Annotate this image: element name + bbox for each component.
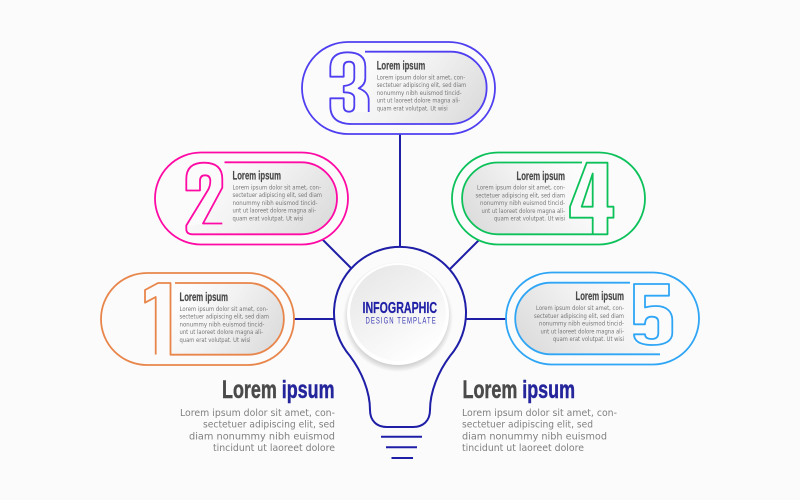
card text 1: unt ut laoreet dolore magna ali- [180, 329, 263, 336]
card text 5: unt ut laoreet dolore magna ali- [540, 328, 624, 335]
card text 1: nonummy nibh euismod tincid- [180, 321, 264, 328]
disc title: INFOGRAPHIC [362, 300, 437, 317]
text block: right: Lorem ipsum dolor sit amet, con- [462, 408, 617, 419]
card text 2: quam erat volutpat. Ut wisi [232, 215, 304, 222]
card text 4: sectetuer adipiscing elit, sed diam [476, 192, 565, 199]
card text 3: Lorem ipsum dolor sit amet, con- [377, 74, 465, 82]
numeral 2 outline [186, 162, 337, 234]
disc subtitle: DESIGN TEMPLATE [366, 315, 436, 326]
card text 3: nonummy nibh euismod tincid- [377, 90, 462, 97]
card text 4: Lorem ipsum [516, 171, 565, 183]
card text 3 [377, 60, 466, 112]
panel: step 4 [452, 152, 645, 244]
right heading: Lorem ipsum [462, 376, 575, 404]
numeral 5 outline [515, 283, 672, 354]
text block: left [180, 376, 335, 454]
panel: step 1 [101, 273, 294, 365]
card text 5: Lorem ipsum [576, 291, 624, 303]
numeral 3 outline [330, 52, 487, 124]
card text 4: nonummy nibh euismod tincid- [480, 200, 565, 207]
card text 4: Lorem ipsum dolor sit amet, con- [477, 185, 565, 192]
card text 3: Lorem ipsum [377, 60, 425, 72]
card text 4: unt ut laoreet dolore magna ali- [482, 208, 565, 215]
left heading: Lorem ipsum [222, 376, 334, 404]
text block: right: sectetuer adipiscing elit, sed [462, 420, 593, 431]
card text 1 [180, 292, 269, 344]
text block: left: sectetuer adipiscing elit, sed [203, 420, 335, 431]
text block: left: Lorem ipsum dolor sit amet, con- [180, 408, 335, 419]
card text 3: quam erat volutpat. Ut wisi [377, 105, 448, 112]
panel: step 2 [155, 152, 348, 244]
card text 4 [476, 171, 565, 222]
card text 1: quam erat volutpat. Ut wisi [180, 337, 251, 344]
text block: right: diam nonummy nibh euismod [462, 431, 607, 442]
card text 1: sectetuer adipiscing elit, sed diam [180, 314, 269, 321]
card text 5: nonummy nibh euismod tincid- [539, 321, 624, 328]
text block: right: tincidunt ut laoreet dolore [462, 443, 584, 454]
panel: step 3 [302, 42, 495, 134]
card text 2: sectetuer adipiscing elit, sed diam [232, 192, 322, 199]
icon: light bulb outline [334, 247, 466, 458]
central disc with title [343, 262, 453, 372]
card text 5: quam erat volutpat. Ut wisi [553, 336, 624, 343]
text block: left: tincidunt ut laoreet dolore [213, 443, 335, 454]
card text 4: quam erat volutpat. Ut wisi [494, 216, 565, 222]
card text 2 [232, 170, 322, 222]
text block: right [462, 376, 617, 454]
card text 3: unt ut laoreet dolore magna ali- [377, 98, 460, 105]
card text 1: Lorem ipsum dolor sit amet, con- [180, 306, 268, 313]
card text 5 [534, 291, 624, 343]
text block: left: diam nonummy nibh euismod [189, 431, 335, 442]
card text 5: sectetuer adipiscing elit, sed diam [534, 313, 624, 320]
card text 1: Lorem ipsum [180, 292, 228, 304]
connector lines [294, 134, 506, 319]
card text 3: sectetuer adipiscing elit, sed diam [377, 82, 466, 89]
card text 2: nonummy nibh euismod tincid- [232, 200, 318, 207]
card text 2: Lorem ipsum dolor sit amet, con- [232, 184, 321, 192]
card text 2: Lorem ipsum [232, 170, 281, 182]
card text 2: unt ut laoreet dolore magna ali- [232, 208, 316, 215]
panel: step 5 [506, 272, 699, 364]
numeral 1 outline [145, 283, 284, 355]
numeral 4 outline [462, 162, 614, 234]
card text 5: Lorem ipsum dolor sit amet, con- [536, 305, 624, 312]
